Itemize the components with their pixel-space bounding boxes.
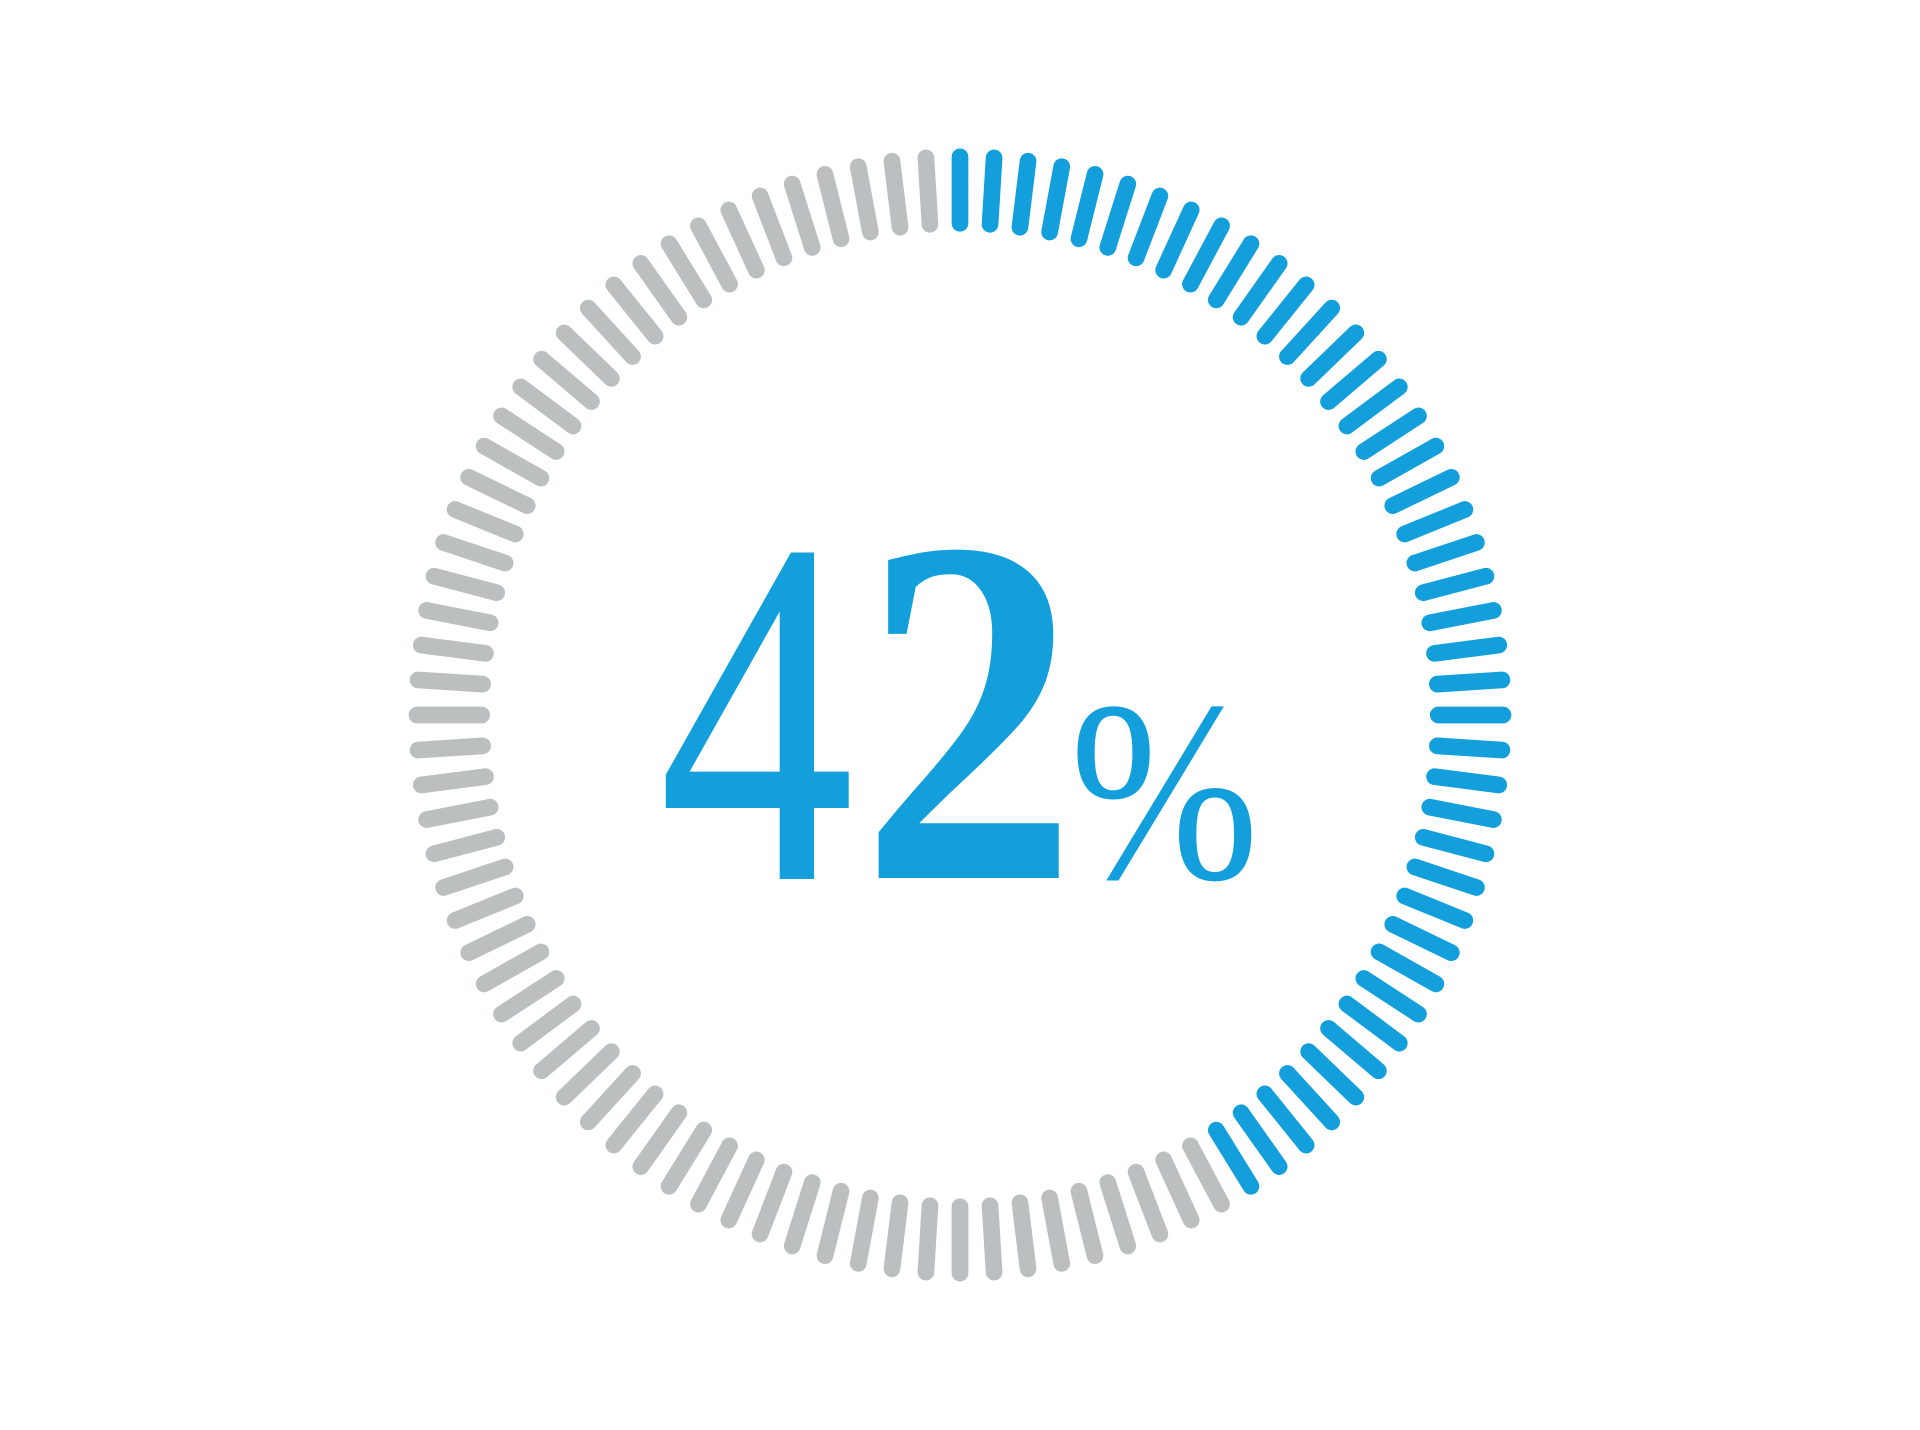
radial progress ring	[402, 141, 1518, 1289]
digit 2: 2	[860, 436, 1077, 985]
blue ticks: 42 of 100	[960, 157, 1518, 1186]
percent sign: %	[1070, 648, 1259, 934]
big percentage value	[659, 436, 1259, 986]
gray ticks: remaining 58 of 100	[402, 141, 1222, 1289]
digit 4: 4	[659, 440, 854, 986]
